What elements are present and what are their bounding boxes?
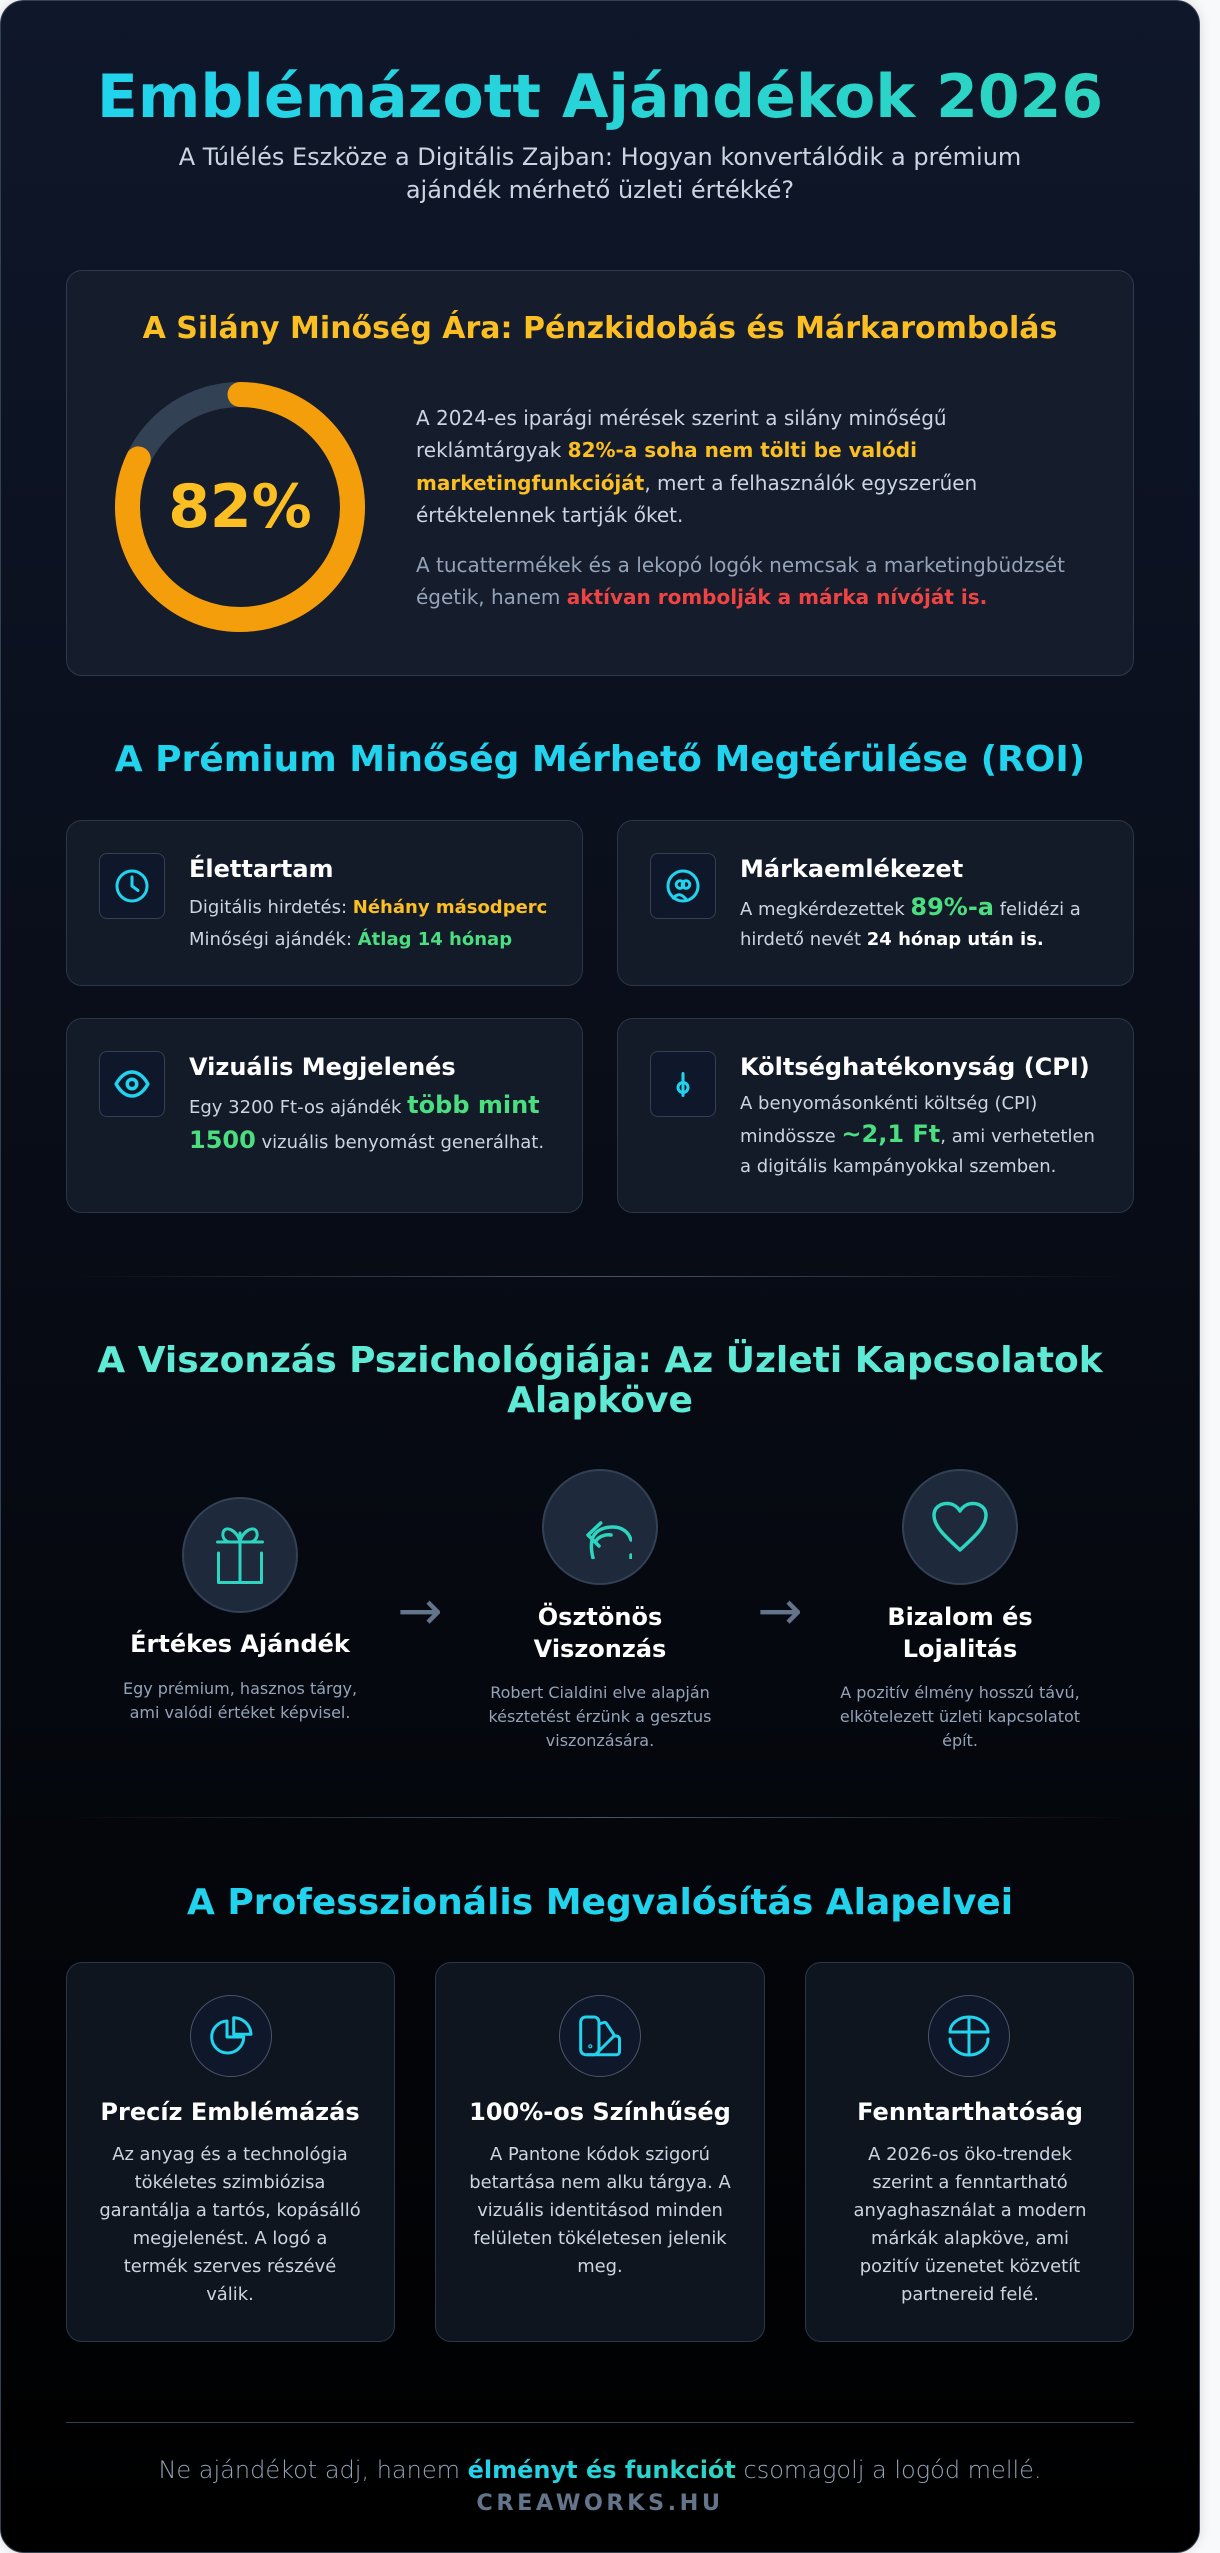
- icon: clock: [99, 853, 165, 919]
- paragraph: measurement: A 2024-es iparági mérések szerint a silány minőségű: [416, 406, 947, 430]
- card title: branding: Precíz Emblémázás: [100, 2098, 360, 2126]
- step title: gift: Értékes Ajándék: [130, 1630, 350, 1658]
- card text: [740, 1093, 1095, 1177]
- step text: loyalty: épít.: [942, 1731, 978, 1750]
- arrow: →: [397, 1579, 443, 1642]
- card text: [189, 897, 547, 950]
- heading: ROI: A Prémium Minőség Mérhető Megtérülése (ROI): [115, 739, 1085, 780]
- card text: branding: [99, 2144, 361, 2305]
- paragraph: measurement: reklámtárgyak 82%-a soha nem tölti be valódi: [416, 438, 917, 462]
- card text: sustainability: anyaghasználat a modern: [854, 2200, 1086, 2221]
- heading: reciprocity: A Viszonzás Pszichológiája: Az Üzleti Kapcsolatok: [97, 1340, 1103, 1381]
- card text: Egy 3200 Ft-os ajándék több mint: [189, 1091, 540, 1119]
- step text: reciprocation: késztetést érzünk a gesztus: [488, 1707, 712, 1726]
- card text: Minőségi ajándék: Átlag 14 hónap: [189, 929, 512, 950]
- card title: Élettartam: [189, 855, 334, 883]
- card text: hirdető nevét 24 hónap után is.: [740, 929, 1044, 950]
- footer message: Ne ajándékot adj, hanem élményt és funkciót csomagolj a logód mellé.: [158, 2456, 1042, 2484]
- card text: color fidelity: meg.: [577, 2256, 623, 2277]
- step title: reciprocation: Ösztönös: [538, 1603, 662, 1631]
- heading: reciprocity: [97, 1339, 1104, 1421]
- step text: loyalty: [840, 1683, 1080, 1750]
- card text: a digitális kampányokkal szemben.: [740, 1156, 1056, 1177]
- step text: gift: ami valódi értéket képvisel.: [130, 1703, 350, 1722]
- card: lifespan: [66, 820, 583, 986]
- step title: loyalty: Lojalitás: [903, 1635, 1017, 1663]
- card title: Vizuális Megjelenés: [189, 1053, 456, 1081]
- subtitle: ajándék mérhető üzleti értékké?: [406, 176, 794, 204]
- card text: sustainability: partnereid felé.: [901, 2284, 1039, 2305]
- card text: [740, 893, 1081, 950]
- card text: branding: tökéletes szimbiózisa: [135, 2172, 325, 2193]
- panel heading: A Silány Minőség Ára: Pénzkidobás és Márkarombolás: [143, 311, 1057, 346]
- card text: color fidelity: vizuális identitásod minden: [477, 2200, 723, 2221]
- paragraph: damage: [416, 553, 1065, 609]
- step text: reciprocation: [488, 1683, 712, 1750]
- step title: reciprocation: [534, 1602, 666, 1663]
- paragraph: measurement: [416, 406, 977, 527]
- paragraph: measurement: marketingfunkcióját, mert a felhasználók egyszerűen: [416, 471, 977, 495]
- card title: Költséghatékonyság (CPI): [740, 1053, 1090, 1081]
- donut chart 82%: [115, 382, 365, 632]
- card text: branding: válik.: [206, 2284, 254, 2305]
- card text: sustainability: [854, 2144, 1086, 2305]
- card title: color fidelity: 100%-os Színhűség: [469, 2098, 731, 2126]
- step title: reciprocation: Viszonzás: [534, 1635, 666, 1663]
- card: sustainability: [805, 1962, 1134, 2342]
- card text: sustainability: A 2026-os öko-trendek: [868, 2144, 1072, 2165]
- card text: color fidelity: felületen tökéletesen jelenik: [473, 2228, 727, 2249]
- card title: sustainability: Fenntarthatóság: [857, 2098, 1083, 2126]
- card text: color fidelity: betartása nem alku tárgya. A: [469, 2172, 731, 2193]
- step title: loyalty: Bizalom és: [887, 1603, 1033, 1631]
- card text: branding: Az anyag és a technológia: [112, 2144, 348, 2165]
- divider: [66, 1276, 1134, 1277]
- step title: loyalty: [887, 1603, 1033, 1663]
- icon: pie chart: [190, 1995, 272, 2077]
- step circle: reciprocation: [542, 1469, 658, 1585]
- card text: sustainability: szerint a fenntartható: [872, 2172, 1068, 2193]
- step text: reciprocation: viszonzására.: [546, 1731, 654, 1750]
- footer brand: CREAWORKS.HU: [476, 2490, 724, 2516]
- card text: branding: garantálja a tartós, kopásálló: [99, 2200, 361, 2221]
- card: brand recall: [617, 820, 1134, 986]
- step text: gift: [123, 1679, 357, 1722]
- paragraph: damage: A tucattermékek és a lekopó logók nemcsak a marketingbüdzsét: [416, 553, 1065, 577]
- step text: loyalty: A pozitív élmény hosszú távú,: [840, 1683, 1080, 1702]
- card: cost per impression: [617, 1018, 1134, 1213]
- step circle: gift: [182, 1497, 298, 1613]
- footer divider: [66, 2422, 1134, 2423]
- card: branding: [66, 1962, 395, 2342]
- card text: 1500 vizuális benyomást generálhat.: [189, 1126, 544, 1154]
- card title: Márkaemlékezet: [740, 855, 963, 883]
- paragraph: measurement: értéktelennek tartják őket.: [416, 503, 683, 527]
- card text: Digitális hirdetés: Néhány másodperc: [189, 897, 547, 918]
- card text: branding: termék szerves részévé: [124, 2256, 336, 2277]
- panel: cost of poor quality: [66, 270, 1134, 676]
- subtitle: A Túlélés Eszköze a Digitális Zajban: Hogyan konvertálódik a prémium: [179, 143, 1021, 171]
- card text: A benyomásonkénti költség (CPI): [740, 1093, 1037, 1114]
- card text: A megkérdezettek 89%-a felidézi a: [740, 893, 1081, 921]
- paragraph: damage: égetik, hanem aktívan rombolják a márka nívóját is.: [416, 585, 987, 609]
- card: visual presence: [66, 1018, 583, 1213]
- card text: branding: megjelenést. A logó a: [133, 2228, 327, 2249]
- step text: reciprocation: Robert Cialdini elve alapján: [490, 1683, 710, 1702]
- divider: [66, 1817, 1134, 1818]
- subtitle: [179, 143, 1021, 204]
- card: color fidelity: [435, 1962, 765, 2342]
- card text: color fidelity: [469, 2144, 731, 2277]
- icon: coin stem: [650, 1051, 716, 1117]
- heading: reciprocity: Alapköve: [507, 1380, 693, 1421]
- icon: recall: [650, 853, 716, 919]
- title: Emblémázott Ajándékok 2026: [97, 62, 1103, 132]
- step circle: heart: [902, 1469, 1018, 1585]
- card text: sustainability: márkák alapköve, ami: [871, 2228, 1069, 2249]
- step text: gift: Egy prémium, hasznos tárgy,: [123, 1679, 357, 1698]
- donut value: 82%: [168, 472, 312, 542]
- card text: sustainability: pozitív üzenetet közvetít: [860, 2256, 1080, 2277]
- icon: eye: [99, 1051, 165, 1117]
- icon: globe: [928, 1995, 1010, 2077]
- arrow: →: [757, 1579, 803, 1642]
- card text: [189, 1091, 544, 1154]
- heading: principles: A Professzionális Megvalósítás Alapelvei: [187, 1882, 1013, 1923]
- icon: swatches: [559, 1995, 641, 2077]
- card text: color fidelity: A Pantone kódok szigorú: [490, 2144, 710, 2165]
- card text: mindössze ~2,1 Ft, ami verhetetlen: [740, 1120, 1095, 1148]
- step text: loyalty: elkötelezett üzleti kapcsolatot: [840, 1707, 1080, 1726]
